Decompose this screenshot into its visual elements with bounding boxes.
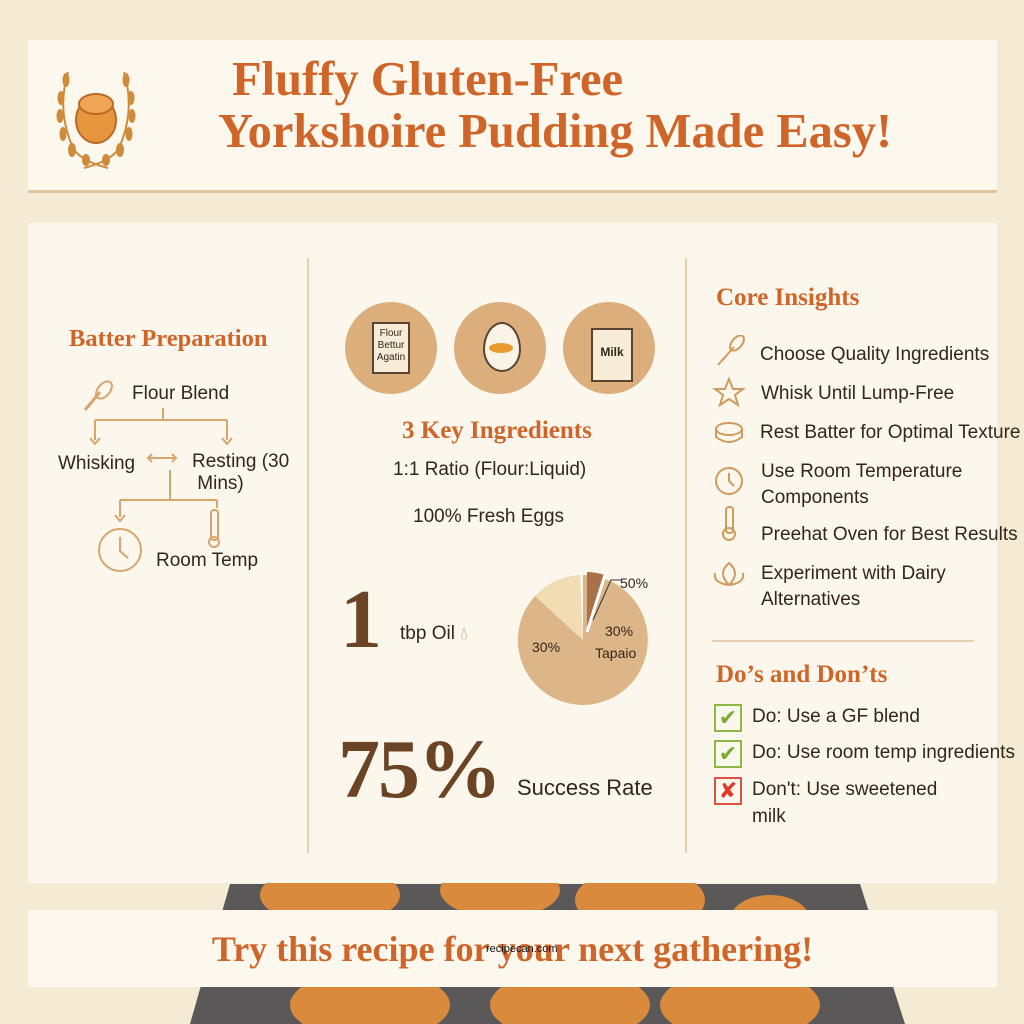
panel: core insights: Whisk Until Lump-Free xyxy=(761,383,954,404)
panel: core insights: Preehat Oven for Best Results xyxy=(761,524,1018,545)
panel: do's and don'ts: Don't: Use sweetened xyxy=(752,779,937,800)
panel: batter preparation: Batter Preparation xyxy=(69,325,267,352)
panel: core insights xyxy=(712,284,1020,642)
panel: ingredients: Success Rate xyxy=(517,775,653,800)
panel: core insights: Choose Quality Ingredients xyxy=(760,344,989,365)
panel: batter preparation xyxy=(58,325,289,572)
pie chart: Tapaio xyxy=(595,645,636,661)
panel: batter preparation: Resting (30 xyxy=(192,451,289,472)
title: Yorkshoire Pudding Made Easy! xyxy=(218,105,892,158)
main panel xyxy=(28,223,997,883)
icon: egg xyxy=(454,302,546,394)
stat: 75% success rate: 75% xyxy=(338,723,500,816)
header panel xyxy=(28,40,997,193)
icon: milk xyxy=(563,302,655,394)
footer banner: recipecan.com xyxy=(486,943,558,955)
footer banner xyxy=(28,910,997,987)
icon: flour xyxy=(345,302,437,394)
icon: cross: ✘ xyxy=(719,778,737,803)
panel: batter preparation: Room Temp xyxy=(156,550,258,571)
icon: milk: Milk xyxy=(600,345,624,359)
icon: check xyxy=(714,704,742,732)
panel: core insights: Use Room Temperature xyxy=(761,461,962,482)
panel: do's and don'ts: Do: Use a GF blend xyxy=(752,706,920,727)
panel: batter preparation: Flour Blend xyxy=(132,383,229,404)
icon: check xyxy=(714,740,742,768)
panel: ingredients: 3 Key Ingredients xyxy=(402,417,592,444)
tray with puddings xyxy=(190,883,905,1024)
panel: core insights: Alternatives xyxy=(761,589,860,610)
panel: do's and don'ts: Do: Use room temp ingredients xyxy=(752,742,1015,763)
pie chart: 30% xyxy=(605,623,633,639)
panel: core insights: Rest Batter for Optimal Texture xyxy=(760,422,1020,443)
panel: core insights: Core Insights xyxy=(716,284,859,311)
panel: ingredients: 1:1 Ratio (Flour:Liquid) xyxy=(393,459,586,480)
icon: check: ✔ xyxy=(719,741,737,766)
panel: ingredients: tbp Oil 💧︎ xyxy=(400,623,468,644)
panel: do's and don'ts: milk xyxy=(752,806,786,827)
stat: 1 tbp oil: 1 xyxy=(340,573,382,666)
icon: flour: Flour xyxy=(380,328,402,339)
icon: flour: Agatin xyxy=(377,352,405,363)
panel: ingredients xyxy=(338,302,655,816)
panel: batter preparation: Mins) xyxy=(197,473,244,494)
panel: do's and don'ts xyxy=(714,661,1015,827)
panel: ingredients: 100% Fresh Eggs xyxy=(413,506,564,527)
pie chart: 50% xyxy=(620,575,648,591)
icon: flour: Bettur xyxy=(378,340,404,351)
icon: cross xyxy=(714,777,742,805)
footer banner: Try this recipe for your next gathering! xyxy=(212,929,813,969)
panel: batter preparation: Whisking xyxy=(58,453,135,474)
pie chart: 30% xyxy=(532,639,560,655)
panel: do's and don'ts: Do’s and Don’ts xyxy=(716,661,887,688)
icon: check: ✔ xyxy=(719,705,737,730)
title xyxy=(218,53,892,158)
pie chart xyxy=(518,572,648,705)
panel: core insights: Components xyxy=(761,487,869,508)
icon: laurel with pudding xyxy=(56,72,136,169)
panel: core insights: Experiment with Dairy xyxy=(761,563,946,584)
title: Fluffy Gluten-Free xyxy=(232,53,623,106)
